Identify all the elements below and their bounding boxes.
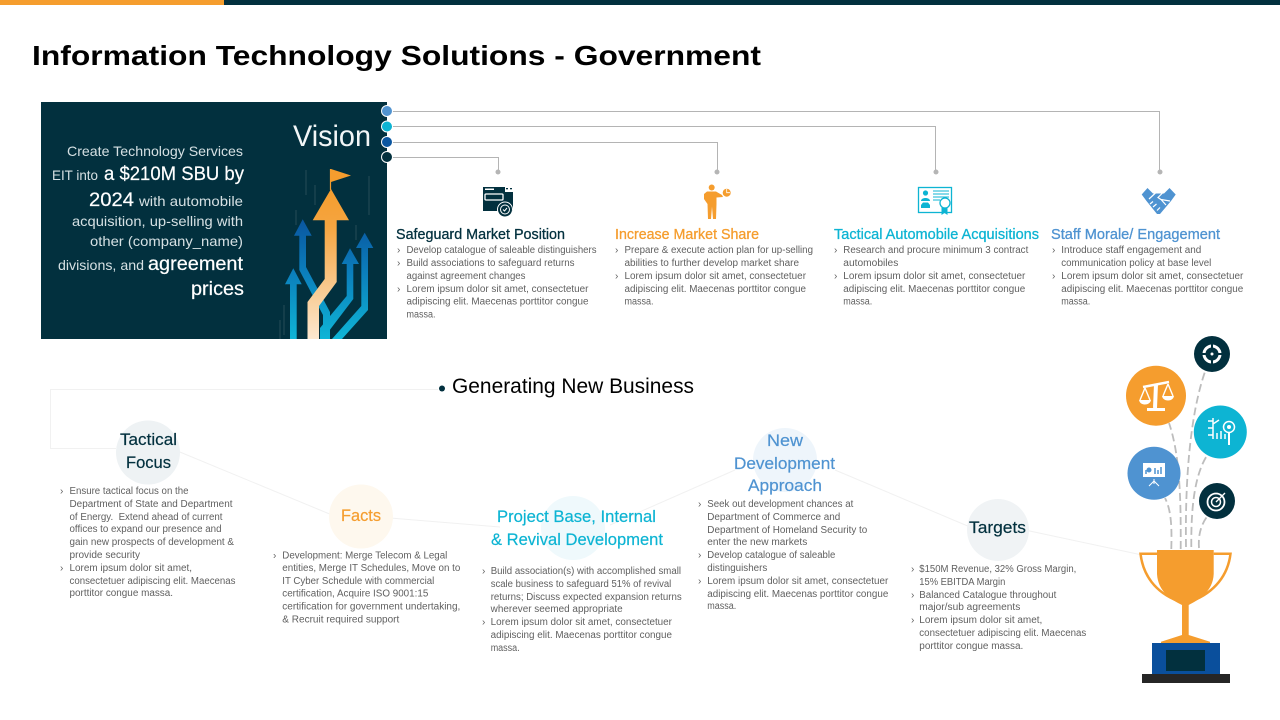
connector: staff morale: [387, 112, 1162, 174]
list: acquisitions: Lorem ipsum dolor sit amet, consectetuer: [843, 271, 1026, 282]
panel: vision: [41, 102, 387, 339]
icon: vehicle certificate: [918, 188, 952, 215]
connector: safeguard: [387, 158, 500, 174]
connector dots: [382, 106, 392, 162]
step: project base: & Revival Development: [491, 530, 663, 549]
panel: staff morale engagement: Staff Morale/ Engagement: [1051, 226, 1221, 243]
step: new development approach: Development: [734, 454, 835, 473]
list: staff morale: ›: [1052, 245, 1055, 256]
icon: target crosshair circle: [1194, 336, 1230, 372]
list: targets: ›: [911, 564, 914, 575]
list: tactical focus: provide security: [70, 550, 140, 561]
list: safeguard: Build associations to safeguard returns: [406, 258, 575, 269]
list: tactical focus: Department of State and Department: [70, 499, 233, 510]
panel: safeguard market position: [396, 226, 597, 320]
step: project base: [482, 496, 682, 654]
list: project base: Build association(s) with accomplished small: [491, 566, 681, 577]
step: tactical focus: [60, 420, 236, 599]
list: tactical focus: porttitor congue massa.: [70, 588, 173, 599]
list: project base: scale business to safeguard 51% of revival: [491, 579, 671, 590]
icon: secure folder: [483, 187, 513, 217]
list: new development: Department of Homeland Security to: [707, 525, 868, 536]
list: facts: & Recruit required support: [282, 614, 400, 626]
connector: tactical automobile: [387, 126, 938, 174]
list: targets: porttitor congue massa.: [919, 641, 1023, 652]
panel: increase market share: [615, 226, 813, 308]
list: market share: ›: [615, 245, 618, 256]
list: targets: $150M Revenue, 32% Gross Margin,: [919, 564, 1076, 575]
list: project base: [482, 566, 682, 654]
list: targets: [911, 564, 1086, 652]
list: tactical focus: gain new prospects of development &: [70, 537, 234, 548]
list: safeguard: Develop catalogue of saleable distinguishers: [406, 245, 597, 256]
list: tactical focus: consectetuer adipiscing elit. Maecenas: [70, 576, 236, 587]
vision statement: Create Technology Services: [67, 143, 243, 159]
list: safeguard: Lorem ipsum dolor sit amet, consectetuer: [406, 284, 589, 295]
list: new development: enter the new markets: [707, 537, 807, 548]
list: tactical focus: of Energy. Extend ahead of current: [70, 512, 223, 523]
panel: increase market share: Increase Market Share: [615, 226, 759, 243]
list: safeguard: ›: [397, 245, 400, 256]
list: facts: [273, 550, 461, 626]
list: market share: Prepare & execute action plan for up-selling: [624, 245, 813, 256]
vision statement: agreement: [148, 254, 244, 275]
list: new development: Develop catalogue of saleable: [707, 550, 836, 561]
list: tactical focus: ›: [60, 486, 63, 497]
list: staff morale: adipiscing elit. Maecenas porttitor congue: [1061, 284, 1244, 295]
step: new development approach: Approach: [748, 476, 822, 495]
vision heading: Vision: [293, 120, 371, 153]
panel: staff morale engagement: [1051, 226, 1244, 308]
list: facts: ›: [273, 550, 276, 562]
list: targets: major/sub agreements: [919, 602, 1020, 613]
step: tactical focus: Focus: [126, 453, 171, 472]
list: new development: distinguishers: [707, 563, 767, 574]
list: project base: massa.: [491, 643, 520, 654]
list: safeguard: ›: [397, 258, 400, 269]
list: tactical focus: ›: [60, 563, 63, 574]
list: new development: ›: [698, 550, 701, 561]
list: project base: ›: [482, 566, 485, 577]
vision statement: a $210M SBU by: [104, 164, 244, 185]
list: market share: massa.: [624, 296, 654, 308]
vision statement: other (company_name): [90, 233, 243, 249]
title: Information Technology Solutions - Government: [32, 40, 761, 71]
list: staff morale: communication policy at base level: [1061, 258, 1211, 269]
list: safeguard: ›: [397, 284, 400, 295]
list: market share: adipiscing elit. Maecenas porttitor congue: [624, 284, 807, 295]
list: acquisitions: adipiscing elit. Maecenas porttitor congue: [843, 284, 1026, 295]
list: facts: IT Cyber Schedule with commercial: [282, 576, 434, 587]
list: new development: adipiscing elit. Maecenas porttitor congue: [707, 589, 889, 600]
list: acquisitions: massa.: [843, 296, 872, 308]
panel: safeguard market position: Safeguard Market Position: [396, 226, 565, 243]
list: staff morale: massa.: [1061, 296, 1090, 308]
vision statement: prices: [191, 279, 244, 300]
list: new development: [698, 499, 889, 612]
list: staff morale: Lorem ipsum dolor sit amet, consectetuer: [1061, 271, 1244, 282]
vision statement: [52, 143, 244, 300]
list: project base: adipiscing elit. Maecenas porttitor congue: [491, 630, 673, 641]
list: acquisitions: ›: [834, 271, 837, 282]
step: project base: Project Base, Internal: [497, 507, 656, 526]
icon: dart target circle: [1199, 483, 1235, 519]
icon: growth search circle: [1194, 406, 1247, 458]
list: market share: Lorem ipsum dolor sit amet, consectetuer: [624, 271, 807, 282]
list: new development: massa.: [707, 601, 736, 612]
vision statement: EIT into: [52, 167, 98, 183]
list: safeguard: [397, 245, 597, 320]
icon: person with pie chart: [704, 184, 731, 219]
connector path: business journey: [50, 390, 1142, 555]
list: tactical focus: offices to expand our presence and: [70, 524, 222, 535]
list: tactical focus: Lorem ipsum dolor sit amet,: [70, 563, 192, 574]
icon: scales circle: [1126, 366, 1186, 426]
list: new development: ›: [698, 499, 701, 510]
list: acquisitions: [834, 245, 1029, 308]
step: new development approach: [698, 428, 889, 612]
list: safeguard: massa.: [406, 310, 436, 320]
list: staff morale: ›: [1052, 271, 1055, 282]
list: facts: certification, Acquire ISO 9001:15: [282, 588, 429, 600]
list: project base: wherever seemed appropriate: [490, 604, 623, 615]
list: new development: Lorem ipsum dolor sit amet, consectetuer: [707, 576, 889, 587]
dashed stems rising from trophy: [1165, 372, 1207, 549]
icon: presentation board circle: [1128, 447, 1180, 500]
list: targets: Balanced Catalogue throughout: [919, 590, 1057, 601]
list: staff morale: Introduce staff engagement and: [1061, 245, 1201, 256]
list: new development: Department of Commerce and: [707, 512, 840, 523]
list: facts: certification for government undertaking,: [282, 602, 460, 612]
step: new development approach: New: [767, 431, 804, 450]
vision statement: with automobile: [138, 193, 243, 209]
step: tactical focus: Tactical: [120, 430, 177, 449]
list: acquisitions: ›: [834, 245, 837, 256]
heading: generating new business: Generating New Business: [452, 375, 694, 398]
list: market share: abilities to further develop market share: [624, 258, 800, 269]
list: new development: ›: [698, 576, 701, 587]
step: targets: [911, 499, 1086, 652]
list: acquisitions: Research and procure minimum 3 contract: [843, 245, 1029, 256]
connector: market share: [387, 142, 720, 174]
step: targets: Targets: [969, 518, 1026, 537]
list: project base: ›: [482, 617, 485, 628]
list: market share: ›: [615, 271, 618, 282]
vision statement: 2024: [89, 190, 134, 211]
list: project base: Lorem ipsum dolor sit amet, consectetuer: [491, 617, 673, 628]
list: facts: Development: Merge Telecom & Legal: [282, 550, 447, 562]
step: facts: [273, 484, 461, 626]
icon: handshake: [1142, 188, 1176, 214]
list: project base: returns; Discuss expected expansion returns: [491, 592, 682, 603]
panel: tactical automobile acquisitions: [834, 226, 1039, 308]
step: facts: Facts: [341, 506, 381, 525]
top accent bar: [0, 0, 1280, 5]
list: targets: ›: [911, 615, 914, 626]
vision statement: acquisition, up-selling with: [72, 213, 243, 229]
vision statement: divisions, and: [58, 257, 144, 273]
list: targets: ›: [911, 590, 914, 601]
list: safeguard: adipiscing elit. Maecenas porttitor congue: [406, 296, 589, 308]
list: targets: 15% EBITDA Margin: [919, 577, 1005, 588]
list: safeguard: against agreement changes: [406, 271, 526, 282]
list: tactical focus: [60, 486, 236, 599]
list: tactical focus: Ensure tactical focus on the: [70, 486, 189, 497]
list: new development: Seek out development chances at: [707, 499, 854, 510]
list: market share: [615, 245, 813, 308]
list: targets: consectetuer adipiscing elit. Maecenas: [919, 628, 1086, 639]
list: staff morale: [1052, 245, 1244, 308]
panel: tactical automobile acquisitions: Tactical Automobile Acquisitions: [834, 226, 1039, 243]
list: targets: Lorem ipsum dolor sit amet,: [919, 615, 1042, 626]
list: acquisitions: automobiles: [843, 258, 898, 269]
list: facts: entities, Merge IT Schedules, Move on to: [282, 563, 461, 574]
icon: rising arrows with flag: [280, 169, 373, 339]
icon: trophy: [1140, 550, 1230, 683]
